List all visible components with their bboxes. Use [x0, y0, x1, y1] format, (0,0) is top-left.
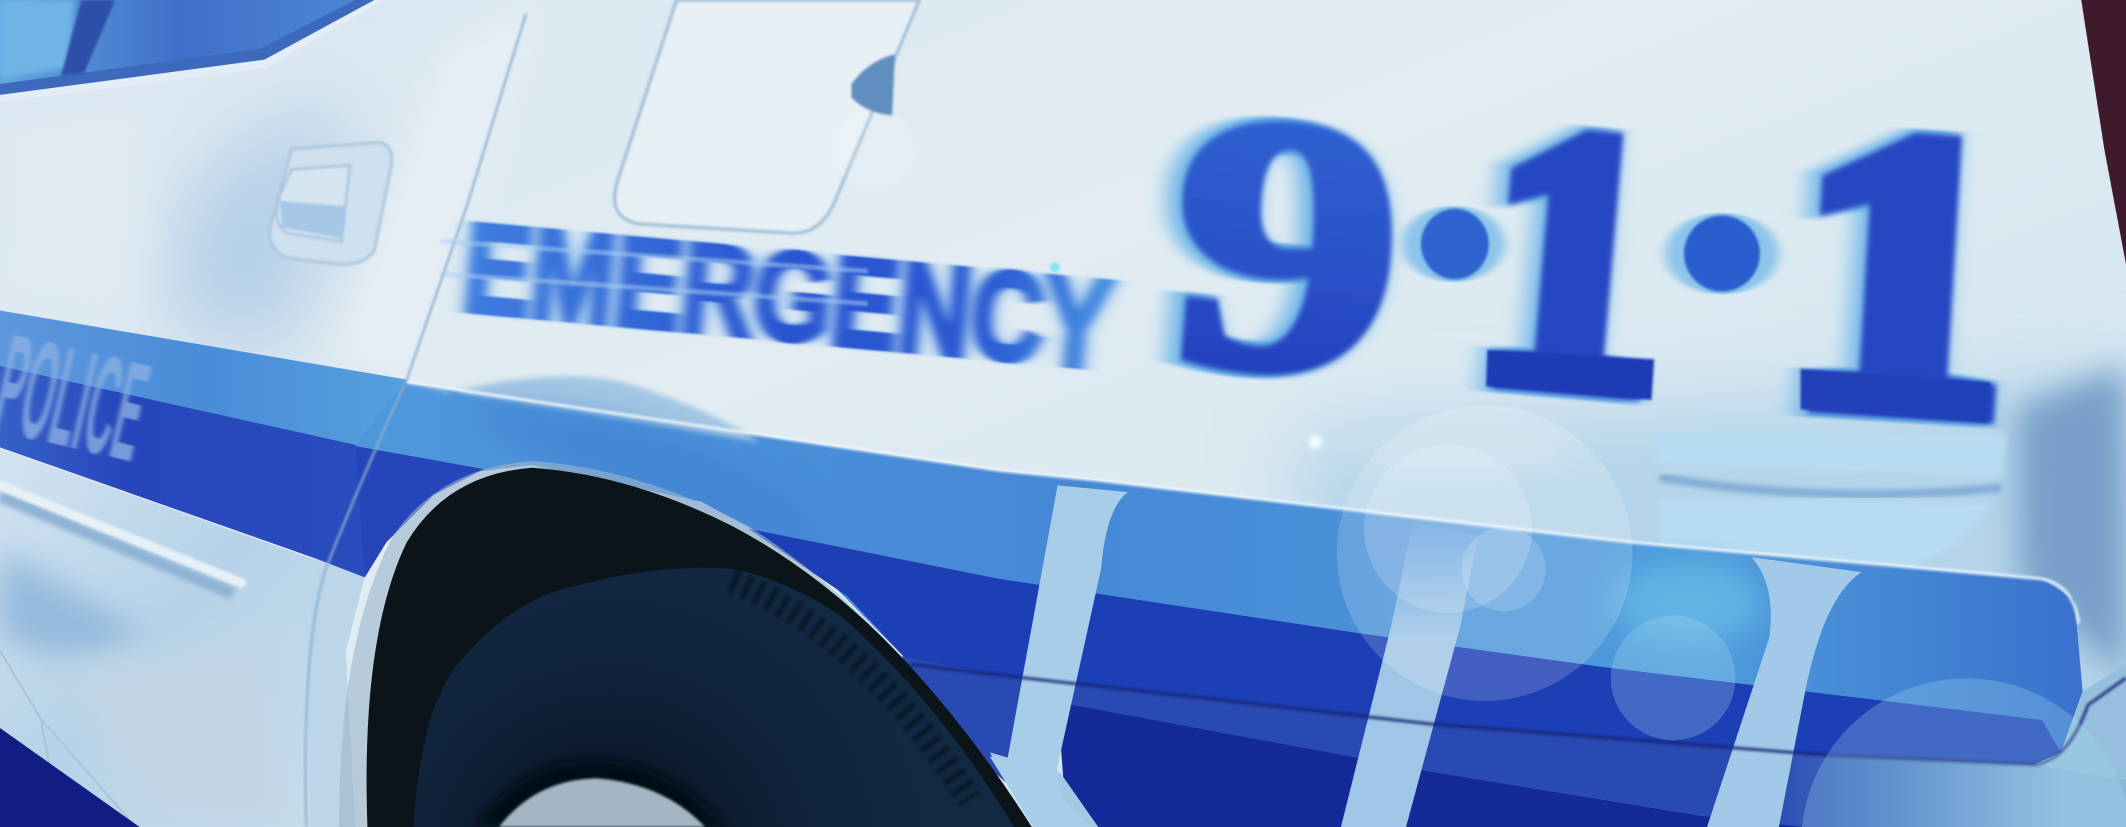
second digit 1: 1: [1774, 46, 2017, 498]
door: light blue stripe: [0, 310, 407, 449]
wheel rim: [475, 759, 725, 827]
lower rear body trim: [990, 752, 1098, 827]
rear fender: light blue stripe: [355, 382, 2083, 765]
door panel reflections: [0, 0, 542, 366]
digit 9: 9: [1158, 35, 1417, 455]
door rub strip: [0, 485, 241, 594]
door seam: [305, 14, 526, 827]
lens flare circles: [1337, 405, 2126, 827]
fender dark blue stripe: [355, 446, 484, 578]
digit 9: 9: [1148, 35, 1407, 454]
vertical light bar 3: [1707, 557, 1862, 827]
first digit 1: 1: [1460, 47, 1669, 470]
road reflection, bottom-left dark corner: [0, 728, 140, 827]
first digit 1: 1: [1468, 48, 1677, 470]
rear lower blue band: [902, 656, 2126, 827]
dot 2: [1665, 213, 1779, 294]
vertical light bar 1: [990, 485, 1128, 827]
body crease highlight: [407, 382, 2079, 624]
dot 1: [1402, 206, 1505, 282]
right side reflection area: [1302, 366, 2126, 827]
far right body below the crease: [2047, 664, 2126, 780]
lower door panel: [0, 449, 316, 827]
shaded arc on upper fender: [407, 376, 759, 442]
rear lowest dark blue block: [1058, 702, 1803, 827]
second digit 1: 1: [1782, 47, 2025, 498]
9-1-1 lettering: [1148, 35, 2025, 498]
EMERGENCY lettering: EMERGENCY: [458, 197, 1117, 397]
door handle: [269, 142, 392, 264]
rear dark blue stripe: [748, 529, 2061, 765]
wheel arch: [339, 461, 1032, 827]
fender lower panel and arch trim: [306, 559, 365, 827]
EMERGENCY lettering: EMERGENCY: [458, 197, 1117, 397]
rear window: [0, 0, 382, 102]
lower crease line: [911, 664, 2126, 765]
fuel door: [615, 0, 919, 233]
tire: [414, 568, 1014, 827]
highlight on stripe: [1613, 563, 1763, 644]
door: dark blue stripe: [0, 366, 365, 578]
dark red background strip at top right: [2081, 0, 2126, 264]
vertical light bar 2: [1341, 522, 1478, 827]
